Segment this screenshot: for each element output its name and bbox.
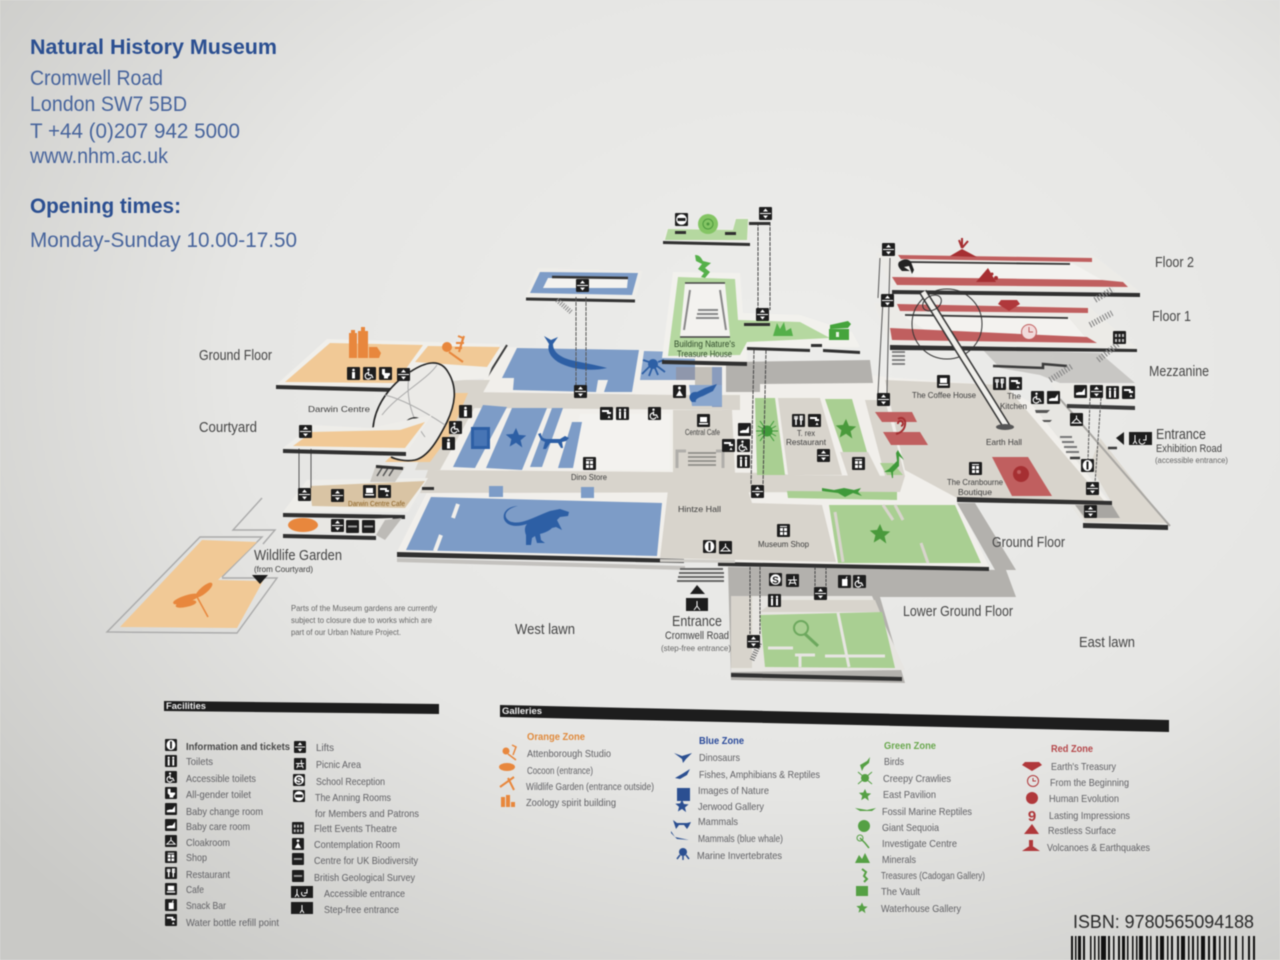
mezzanine lift shafts bbox=[1088, 398, 1101, 483]
Darwin Centre ground floor bbox=[276, 327, 500, 392]
lower ground floor bbox=[731, 567, 905, 681]
icon: magnifying glass bbox=[794, 621, 818, 646]
icon: dragonfly bbox=[173, 581, 214, 617]
facility icons on the map bbox=[298, 207, 1135, 648]
red zone list: Earth's Treasury bbox=[1051, 761, 1117, 773]
address lines bbox=[29, 67, 240, 168]
orange zone list: Orange Zone bbox=[527, 732, 585, 743]
map labels: (step-free entrance) bbox=[661, 643, 731, 653]
red zone list: Volcanoes & Earthquakes bbox=[1047, 842, 1150, 854]
address lines: www.nhm.ac.uk bbox=[29, 145, 168, 168]
facilities column 1: Information and tickets bbox=[186, 742, 290, 753]
facilities column 1: Restaurant bbox=[186, 869, 230, 881]
galleries header bar: Galleries bbox=[502, 706, 542, 717]
icon: star waterhouse bbox=[836, 419, 856, 438]
icon: clock bbox=[1022, 324, 1036, 340]
icon: earth treasury gem bbox=[998, 300, 1020, 311]
top floor Anning Rooms bbox=[663, 214, 770, 326]
icon: fossil fish bbox=[822, 488, 862, 497]
Wildlife Garden bbox=[107, 498, 277, 633]
map labels: Parts of the Museum gardens are currently bbox=[291, 603, 438, 613]
facilities column 2 bbox=[291, 741, 419, 916]
map labels: Hintze Hall bbox=[678, 504, 721, 514]
green zone list: The Vault bbox=[881, 886, 920, 898]
facilities column 2: Accessible entrance bbox=[324, 888, 405, 900]
Darwin Centre lower floors bbox=[283, 393, 468, 540]
heading: opening times: Opening times: bbox=[30, 195, 181, 218]
red zone list: Restless Surface bbox=[1048, 825, 1116, 837]
icon: restless surface bbox=[976, 268, 998, 282]
icon: giant sequoia bbox=[698, 214, 718, 234]
icon: panther bbox=[538, 433, 569, 449]
map labels: (accessible entrance) bbox=[1155, 456, 1228, 465]
icon: step-free entrance bbox=[686, 598, 708, 611]
blue zone list: Mammals (blue whale) bbox=[698, 833, 783, 845]
red zone list: Lasting Impressions bbox=[1049, 810, 1130, 822]
green zone list: Green Zone bbox=[884, 741, 936, 752]
icon: lizard bbox=[690, 384, 717, 402]
green zone list: Fossil Marine Reptiles bbox=[882, 806, 972, 818]
icon: vault chest bbox=[829, 321, 851, 340]
barcode bbox=[1071, 936, 1255, 960]
icon: minerals bbox=[773, 322, 793, 336]
map labels: Lower Ground Floor bbox=[903, 603, 1013, 620]
green zone list: Giant Sequoia bbox=[882, 822, 939, 834]
green zone list: Waterhouse Gallery bbox=[881, 903, 962, 915]
escalator tube and ring bbox=[912, 289, 1014, 430]
ground floor base line bbox=[397, 497, 1112, 571]
facilities column 2: British Geological Survey bbox=[314, 872, 416, 884]
map labels: West lawn bbox=[515, 621, 575, 638]
museum address block bbox=[29, 36, 297, 252]
icon: star east pavilion bbox=[870, 524, 890, 544]
green zone list: Minerals bbox=[882, 854, 916, 866]
zone: blue whale gallery bbox=[487, 336, 639, 392]
icon: heron bird bbox=[884, 450, 904, 478]
facilities column 2: Lifts bbox=[316, 742, 334, 754]
orange zone list: Zoology spirit building bbox=[526, 797, 616, 809]
facilities column 2: School Reception bbox=[316, 776, 385, 788]
elevator shafts bbox=[751, 222, 770, 485]
heading: museum name: Natural History Museum bbox=[30, 36, 277, 59]
icon: spiral fossil bbox=[896, 418, 905, 434]
facilities column 1: Shop bbox=[186, 852, 207, 864]
Floor 2 bbox=[876, 238, 1140, 297]
icon: star bbox=[506, 428, 526, 448]
address lines: Cromwell Road bbox=[30, 67, 163, 90]
green zone list: East Pavilion bbox=[883, 789, 936, 801]
Floor 1 bbox=[874, 258, 1137, 430]
map labels: Entrance bbox=[672, 613, 722, 630]
orange zone list: Attenborough Studio bbox=[527, 748, 611, 760]
zone: green galleries on ground floor bbox=[755, 398, 981, 563]
map labels: Kitchen bbox=[1000, 401, 1027, 411]
orange zone list: Cocoon (entrance) bbox=[527, 765, 593, 777]
map labels: Wildlife Garden bbox=[254, 547, 342, 564]
arrow markers bbox=[489, 486, 594, 498]
map labels: The bbox=[1007, 391, 1021, 401]
entrance marker, Exhibition Road bbox=[1116, 432, 1152, 445]
facilities column 2: Flett Events Theatre bbox=[314, 823, 397, 835]
icon: dinosaur bbox=[504, 506, 569, 545]
zone: fishes amphibians reptiles bbox=[689, 367, 722, 407]
blue zone list bbox=[671, 736, 820, 862]
zone: red galleries on ground floor bbox=[875, 412, 1052, 496]
ground floor slab bbox=[397, 347, 1110, 569]
floor plan map bbox=[107, 207, 1228, 683]
map labels: Central Cafe bbox=[685, 427, 720, 437]
blue zone list: Images of Nature bbox=[698, 785, 769, 797]
map labels: Exhibition Road bbox=[1156, 443, 1222, 455]
central cafe stairs bbox=[688, 453, 716, 465]
arrow: entrance bbox=[690, 585, 705, 594]
map labels: Entrance bbox=[1156, 426, 1206, 443]
map labels: Treasure House bbox=[677, 349, 732, 359]
map labels: Dino Store bbox=[571, 472, 607, 482]
map labels: Earth Hall bbox=[986, 437, 1022, 447]
zone: images of nature, jerwood, mammals bbox=[453, 405, 582, 470]
facilities column 1: Toilets bbox=[186, 756, 213, 768]
orange zone list: Wildlife Garden (entrance outside) bbox=[526, 781, 654, 793]
map labels: Floor 2 bbox=[1155, 254, 1194, 271]
facilities column 1: Accessible toilets bbox=[186, 773, 256, 785]
map labels: Cromwell Road bbox=[665, 630, 729, 642]
facilities header bar bbox=[164, 701, 439, 714]
map labels: T. rex bbox=[797, 428, 816, 438]
red zone list: Human Evolution bbox=[1049, 793, 1119, 805]
map labels: The Cranbourne bbox=[947, 477, 1003, 487]
facilities column 2: Centre for UK Biodiversity bbox=[314, 855, 419, 867]
facilities column 1: Cloakroom bbox=[186, 837, 230, 849]
facilities header bar: Facilities bbox=[166, 701, 206, 711]
icon: zoology spirit building bbox=[349, 327, 381, 358]
map labels: Floor 1 bbox=[1152, 308, 1191, 325]
blue zone list: Blue Zone bbox=[699, 736, 744, 747]
east wing mezzanine bbox=[1035, 383, 1135, 483]
east wing beyond Earth Hall bbox=[1027, 398, 1170, 530]
treasure house floor bbox=[662, 222, 860, 485]
entrance steps, Cromwell Road bbox=[677, 569, 724, 611]
facilities column 2: Contemplation Room bbox=[314, 839, 400, 851]
blue zone list: Fishes, Amphibians & Reptiles bbox=[699, 769, 820, 781]
facilities column 1: Baby change room bbox=[186, 806, 263, 818]
zone: marine invertebrates bbox=[640, 351, 695, 380]
map labels: subject to closure due to works which are bbox=[291, 615, 432, 625]
green zone list: Creepy Crawlies bbox=[883, 773, 951, 785]
facilities column 2: for Members and Patrons bbox=[315, 808, 419, 820]
facilities column 1 bbox=[165, 739, 290, 929]
map labels: The Coffee House bbox=[912, 390, 976, 400]
stairs bbox=[1050, 289, 1118, 380]
red zone list bbox=[1022, 744, 1150, 854]
green zone list bbox=[855, 741, 985, 915]
galleries header bar bbox=[500, 705, 1169, 732]
divider bar bbox=[487, 345, 507, 377]
facilities column 2: Picnic Area bbox=[316, 759, 361, 771]
blue zone list: Dinosaurs bbox=[699, 752, 740, 764]
Darwin Cocoon outline bbox=[373, 363, 454, 461]
upper blue floor bbox=[525, 268, 642, 385]
legend: galleries bbox=[499, 705, 1169, 915]
map labels: Courtyard bbox=[199, 419, 257, 436]
map labels: Mezzanine bbox=[1149, 363, 1209, 380]
icon: spider bbox=[756, 421, 778, 441]
facilities column 1: All-gender toilet bbox=[186, 789, 251, 801]
map labels: Darwin Centre bbox=[308, 404, 370, 414]
Courtyard floor bbox=[283, 415, 432, 456]
red zone list: From the Beginning bbox=[1050, 777, 1129, 789]
icon: dark figure sculpture bbox=[898, 259, 914, 274]
green zone list: Treasures (Cadogan Gallery) bbox=[881, 870, 985, 882]
map labels: part of our Urban Nature Project. bbox=[291, 627, 401, 637]
orange strip under cocoon bbox=[385, 393, 468, 462]
opening hours: Monday-Sunday 10.00-17.50 bbox=[30, 229, 297, 252]
legend: facilities bbox=[164, 701, 439, 929]
map labels: Boutique bbox=[958, 487, 992, 497]
blue zone list: Jerwood Gallery bbox=[698, 801, 765, 813]
icon: treasures statue bbox=[695, 255, 711, 278]
map labels: Building Nature's bbox=[674, 339, 735, 349]
blue zone list: Mammals bbox=[698, 816, 738, 828]
ISBN number: ISBN: 9780565094188 bbox=[1073, 912, 1254, 932]
facilities column 1: Cafe bbox=[186, 884, 204, 896]
green zone list: Birds bbox=[884, 756, 904, 768]
arrow: wildlife garden entry bbox=[252, 575, 268, 584]
green zone list: Investigate Centre bbox=[882, 838, 957, 850]
map labels bbox=[199, 254, 1228, 653]
icon: volcano bbox=[950, 238, 977, 257]
address lines: T +44 (0)207 942 5000 bbox=[30, 120, 240, 143]
orange zone list bbox=[499, 732, 654, 809]
red zone list: 9 bbox=[1028, 808, 1036, 825]
icon: blue whale bbox=[544, 336, 607, 370]
icon: skull bbox=[1013, 466, 1029, 482]
icon: cocoon entrance bbox=[288, 518, 318, 532]
red zone list: Red Zone bbox=[1051, 744, 1093, 755]
map labels: Restaurant bbox=[786, 437, 827, 447]
facilities column 1: Water bottle refill point bbox=[186, 917, 279, 929]
facilities column 2: Step-free entrance bbox=[324, 904, 399, 916]
map labels: Ground Floor bbox=[199, 347, 272, 364]
facilities column 1: Baby care room bbox=[186, 821, 250, 833]
shadows under the upper floors bbox=[397, 350, 1135, 683]
address lines: London SW7 5BD bbox=[30, 93, 187, 116]
map labels: Museum Shop bbox=[758, 539, 809, 549]
icon: attenborough studio bbox=[442, 336, 464, 362]
mezzanine stair bar bbox=[993, 364, 1067, 368]
facilities column 2: The Anning Rooms bbox=[315, 792, 391, 804]
zone: dinosaurs gallery bbox=[406, 486, 662, 556]
map labels: Ground Floor bbox=[992, 534, 1065, 551]
icon: picture frame bbox=[471, 427, 490, 449]
map labels: Darwin Centre Cafe bbox=[348, 501, 405, 508]
map labels: East lawn bbox=[1079, 634, 1135, 651]
map labels: (from Courtyard) bbox=[254, 564, 313, 574]
icon: octopus bbox=[642, 359, 665, 376]
blue zone list: Marine Invertebrates bbox=[697, 850, 782, 862]
facilities column 1: Snack Bar bbox=[186, 900, 226, 912]
lift shafts to lower ground bbox=[750, 567, 826, 635]
